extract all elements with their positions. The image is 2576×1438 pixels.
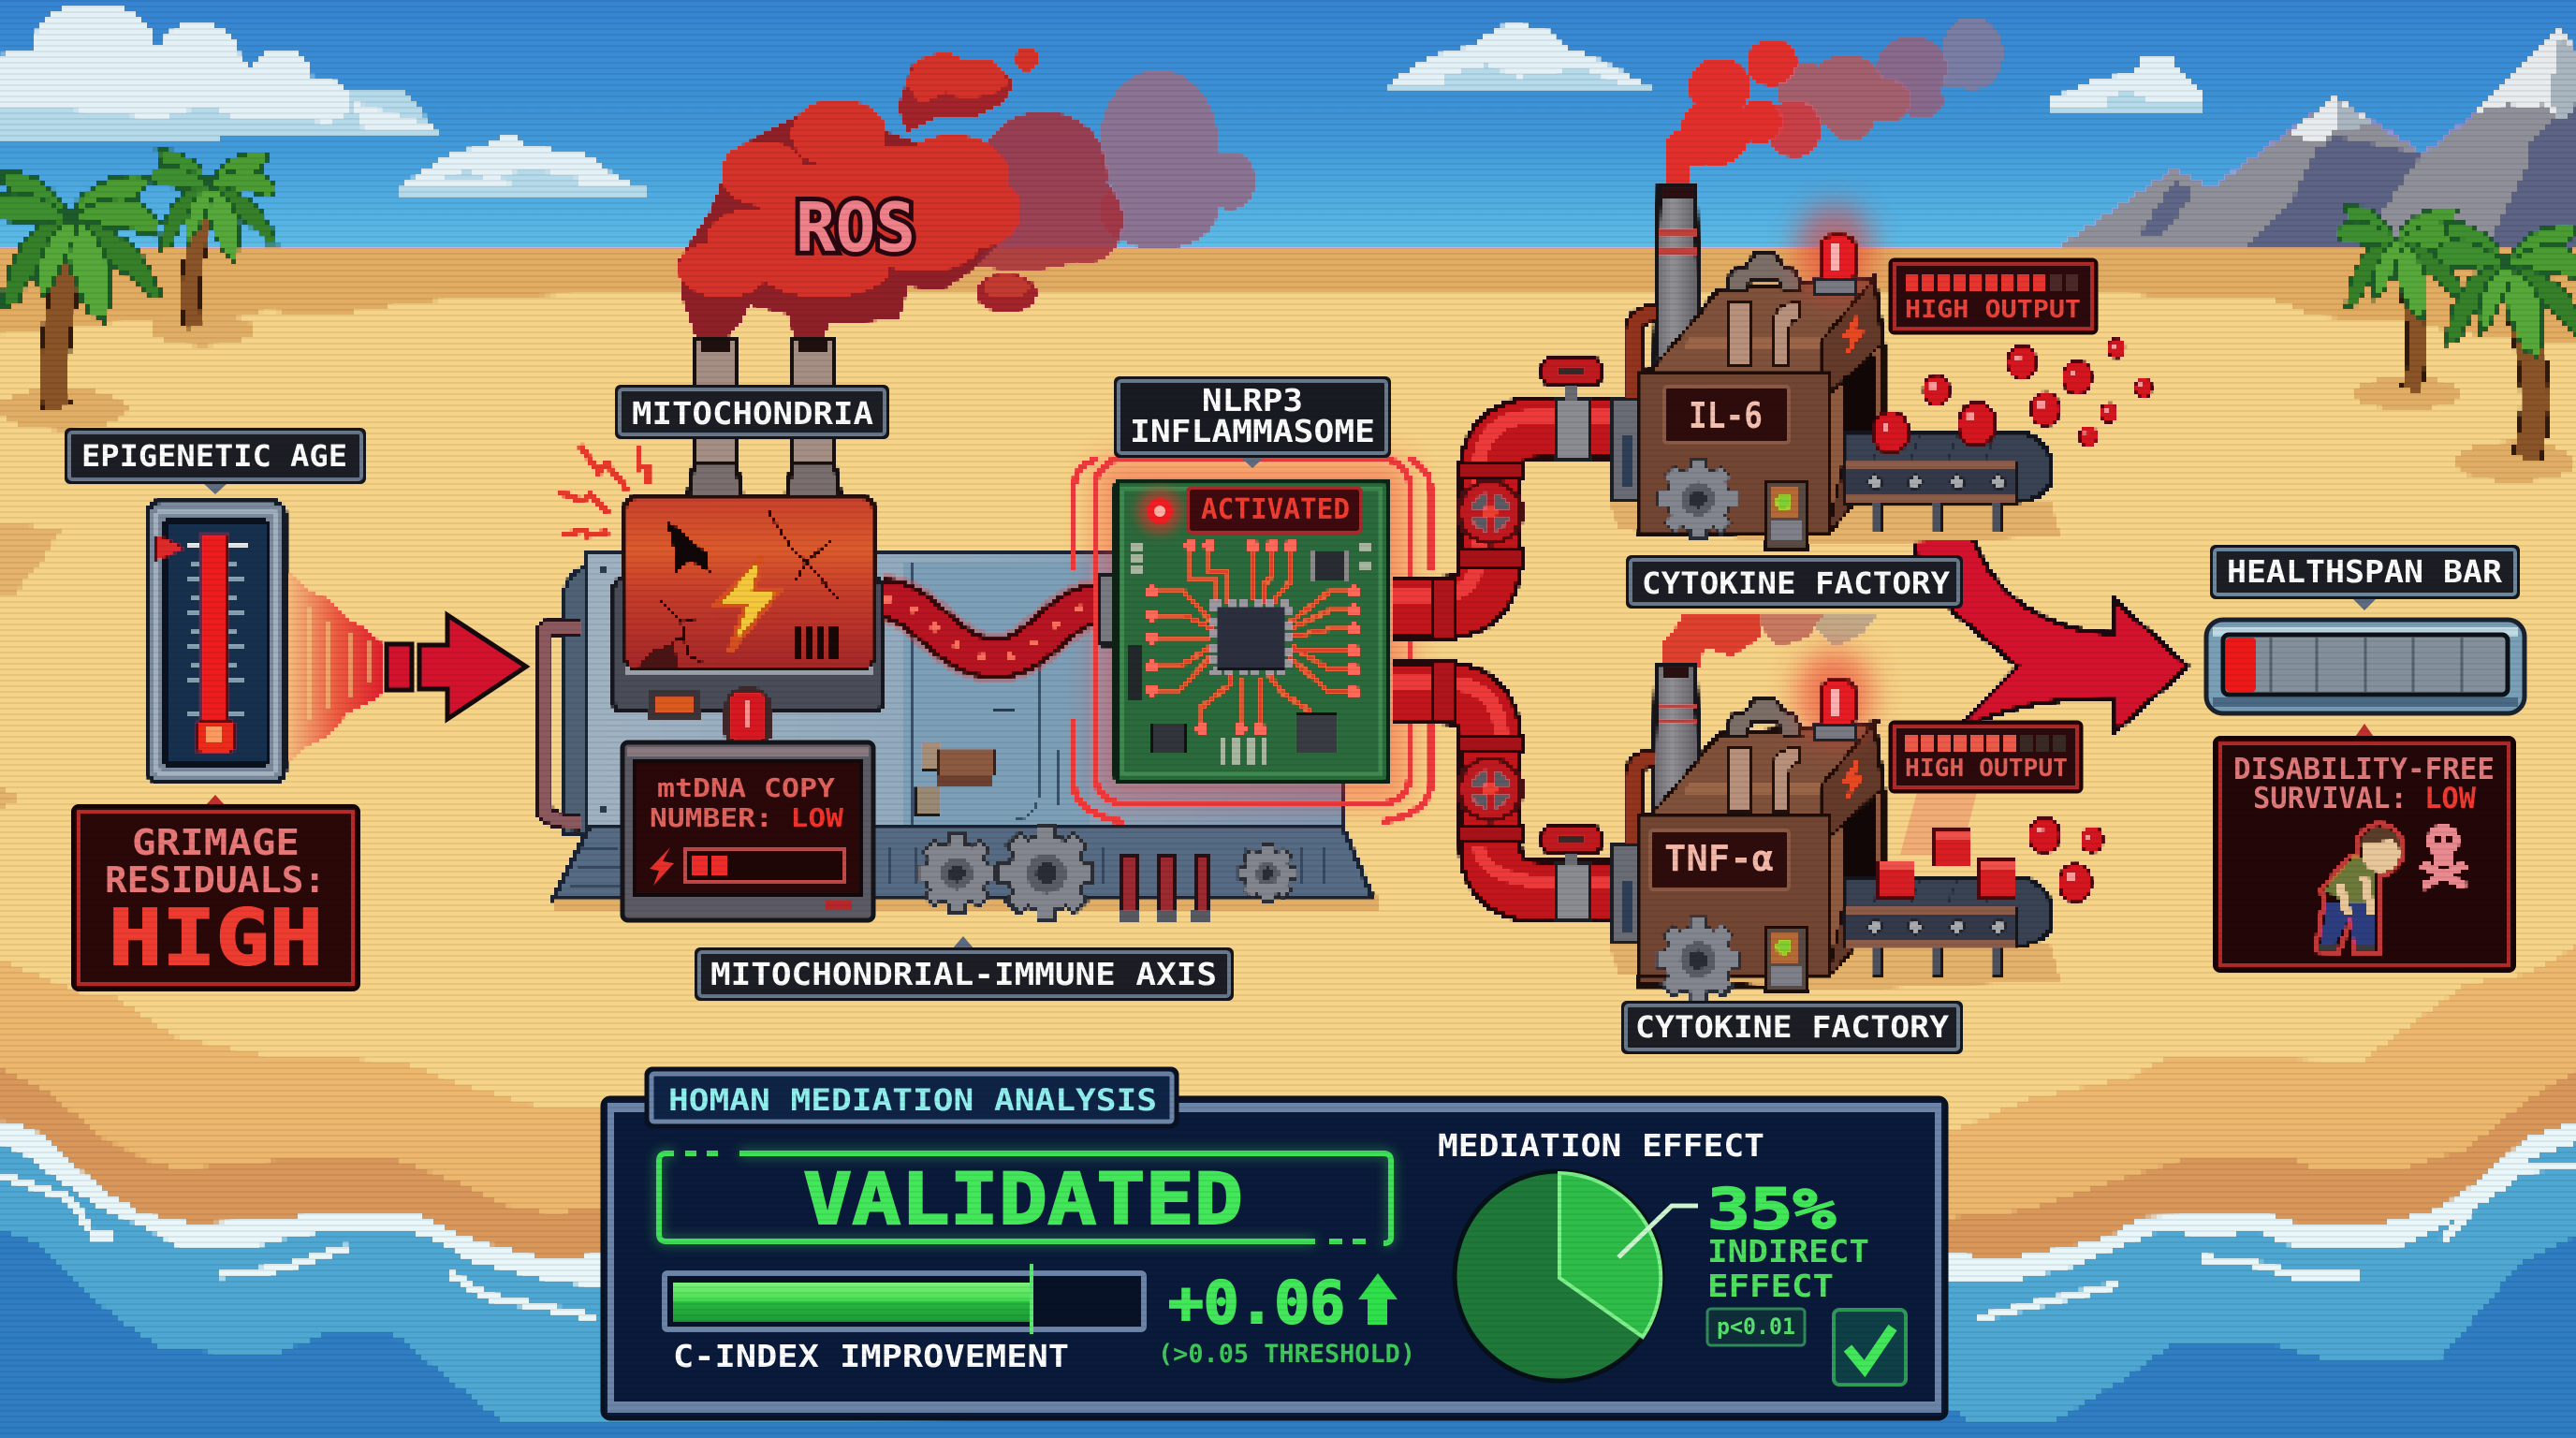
light beam behind output panel: [1900, 792, 1977, 855]
red lumps: [679, 100, 1020, 297]
sand: dark dune band: [0, 245, 2576, 342]
pie chart: [1455, 1171, 1662, 1381]
small components: [1129, 543, 1370, 764]
value: HIGH: [109, 894, 323, 983]
disability-free survival panel: [2215, 724, 2514, 971]
mtdna monitor: [622, 742, 873, 920]
mitochondria label: [615, 385, 889, 439]
palm: trunk third right: [2401, 257, 2417, 391]
lower factory smoke: [1661, 613, 1877, 667]
traces: [1152, 546, 1354, 729]
big red arrow to healthspan: [1915, 538, 2187, 730]
activated badge: [1188, 488, 1361, 533]
validated text: VALIDATED: [803, 1157, 1243, 1240]
ROS smoke cloud: [679, 48, 1254, 339]
mediation heading: MEDIATION EFFECT: [1438, 1127, 1764, 1164]
brown component: [915, 742, 994, 814]
cloud: right: [2053, 56, 2203, 112]
p-value text: p<0.01: [1717, 1313, 1795, 1340]
palm: trunk far right: [2516, 291, 2536, 460]
text line two: SURVIVAL: LOW: [2253, 782, 2476, 815]
nlrp3 glow rings: [1074, 459, 1431, 822]
palm: trunk far left: [53, 246, 69, 409]
factory: il-6: [1610, 187, 2059, 548]
chimneys: [687, 339, 842, 524]
cloud: large left: [0, 4, 438, 139]
palm: crown far right: [2434, 222, 2576, 359]
il-6 particles: [1872, 338, 2152, 454]
indirect text: INDIRECT: [1707, 1233, 1869, 1269]
cloud: small left: [399, 133, 646, 195]
c-index bar: [665, 1264, 1144, 1334]
sign text: TNF-α: [1664, 838, 1774, 879]
cable to inflammasome: [885, 575, 1136, 658]
label line one: NLRP3: [1202, 382, 1303, 418]
label text: MITOCHONDRIA: [632, 395, 873, 432]
deep water: [0, 1228, 2576, 1438]
cracks: [637, 510, 838, 667]
chimney: [1655, 187, 1700, 374]
vents: [793, 625, 838, 661]
monitor text two: NUMBER: LOW: [650, 802, 843, 833]
label line two: INFLAMMASOME: [1130, 413, 1375, 449]
low bolt icon: [650, 847, 674, 886]
cloud: center: [1388, 23, 1652, 91]
upper puff: [899, 48, 1037, 131]
chip: [1214, 604, 1288, 671]
pipe: lower: [1393, 663, 1619, 920]
text line one: DISABILITY-FREE: [2233, 753, 2495, 786]
leader line: [1618, 1206, 1698, 1257]
label text: EPIGENETIC AGE: [81, 438, 347, 474]
tnf-alpha sign: [1650, 830, 1789, 889]
palm: crown third right: [2335, 205, 2466, 320]
healthspan bar: [2206, 620, 2525, 713]
arrow up: [1358, 1273, 1398, 1325]
effect text: EFFECT: [1707, 1268, 1834, 1304]
upper factory smoke: [1665, 18, 2002, 189]
threshold note: (>0.05 THRESHOLD): [1158, 1340, 1415, 1369]
darker wet sand: [0, 1067, 2576, 1438]
grimage residuals panel: [73, 795, 359, 990]
badge text: ACTIVATED: [1201, 493, 1350, 526]
mountains: [2057, 28, 2576, 247]
glow around inflammasome: [1095, 459, 1410, 803]
shallow water: [0, 1142, 2576, 1438]
pipe: upper: [1393, 358, 1619, 638]
indicators: [647, 690, 768, 744]
panel tab: [647, 1069, 1177, 1126]
machine: mitochondrial-immune axis base: [544, 552, 1378, 910]
cytokine factory label: lower: [1621, 1001, 1963, 1054]
icon: tired person: [2316, 824, 2403, 953]
label text: CYTOKINE FACTORY: [1635, 1009, 1950, 1045]
low battery bar: [685, 849, 844, 882]
ROS label: ROS: [796, 188, 915, 267]
c-index value: +0.06: [1168, 1269, 1345, 1337]
heat waves: [290, 575, 382, 759]
palm: crown far left: [0, 171, 161, 323]
label text: CYTOKINE FACTORY: [1642, 565, 1951, 601]
validated box: [659, 1151, 1391, 1244]
LED: [1137, 489, 1182, 534]
smoke columns: [679, 108, 1016, 339]
palm shadows: [0, 313, 2576, 482]
nlrp3 circuit board: [1117, 481, 1388, 782]
tnf-alpha particles: [1876, 816, 2103, 902]
wet sand: [0, 946, 2576, 1438]
percent value: 35%: [1707, 1177, 1836, 1242]
tab text: HOMAN MEDIATION ANALYSIS: [668, 1082, 1157, 1118]
axis label: [695, 936, 1234, 1001]
icon: skull and crossbones: [2422, 825, 2466, 887]
thermometer icon: [148, 502, 285, 782]
cytokine factory label: upper: [1626, 555, 1963, 609]
palm: trunk second left: [190, 203, 205, 328]
panel: hohman mediation analysis: [603, 1069, 1946, 1418]
tnf-alpha output panel: [1890, 722, 2082, 792]
sign text: IL-6: [1689, 395, 1763, 436]
mitochondria reactor: [558, 339, 883, 744]
check box icon: [1834, 1310, 1906, 1385]
factory: tnf-alpha: [1610, 651, 2059, 1004]
il-6 output panel: [1890, 259, 2097, 333]
text: GRIMAGE: [132, 822, 300, 863]
c-index label: C-INDEX IMPROVEMENT: [673, 1338, 1069, 1374]
faded smoke: [936, 71, 1254, 312]
gears and fuses: [916, 825, 1296, 922]
bolt: [718, 554, 778, 651]
c-index fill: [673, 1283, 1032, 1322]
text: RESIDUALS:: [105, 859, 326, 901]
label text: HEALTHSPAN BAR: [2227, 553, 2502, 590]
p-value badge: [1707, 1309, 1805, 1345]
healthspan label: [2210, 545, 2520, 610]
panel text: HIGH OUTPUT: [1905, 296, 2081, 324]
health fill: [2226, 638, 2256, 692]
monitor text one: mtDNA COPY: [657, 772, 835, 803]
palm: crown second left: [150, 150, 277, 262]
foam streaks: [0, 1166, 2576, 1318]
epigenetic age label: [65, 428, 366, 494]
il-6 sign: [1664, 387, 1789, 443]
reactor base: [614, 580, 883, 711]
sky: [0, 0, 2576, 247]
sparks: [558, 446, 648, 536]
panel text: HIGH OUTPUT: [1905, 755, 2068, 783]
sand: side patches: [0, 521, 62, 811]
pie slice 35 percent: [1559, 1173, 1661, 1337]
foam: [0, 1121, 2576, 1438]
output meter: [1905, 735, 2066, 752]
label text: MITOCHONDRIAL-IMMUNE AXIS: [710, 956, 1217, 992]
nlrp3 inflammasome label: [1114, 376, 1391, 468]
output meter: [1906, 274, 2078, 291]
chimney: [1653, 667, 1700, 819]
reactor body: [625, 498, 873, 669]
arrow: epigenetic to machine: [387, 615, 526, 719]
